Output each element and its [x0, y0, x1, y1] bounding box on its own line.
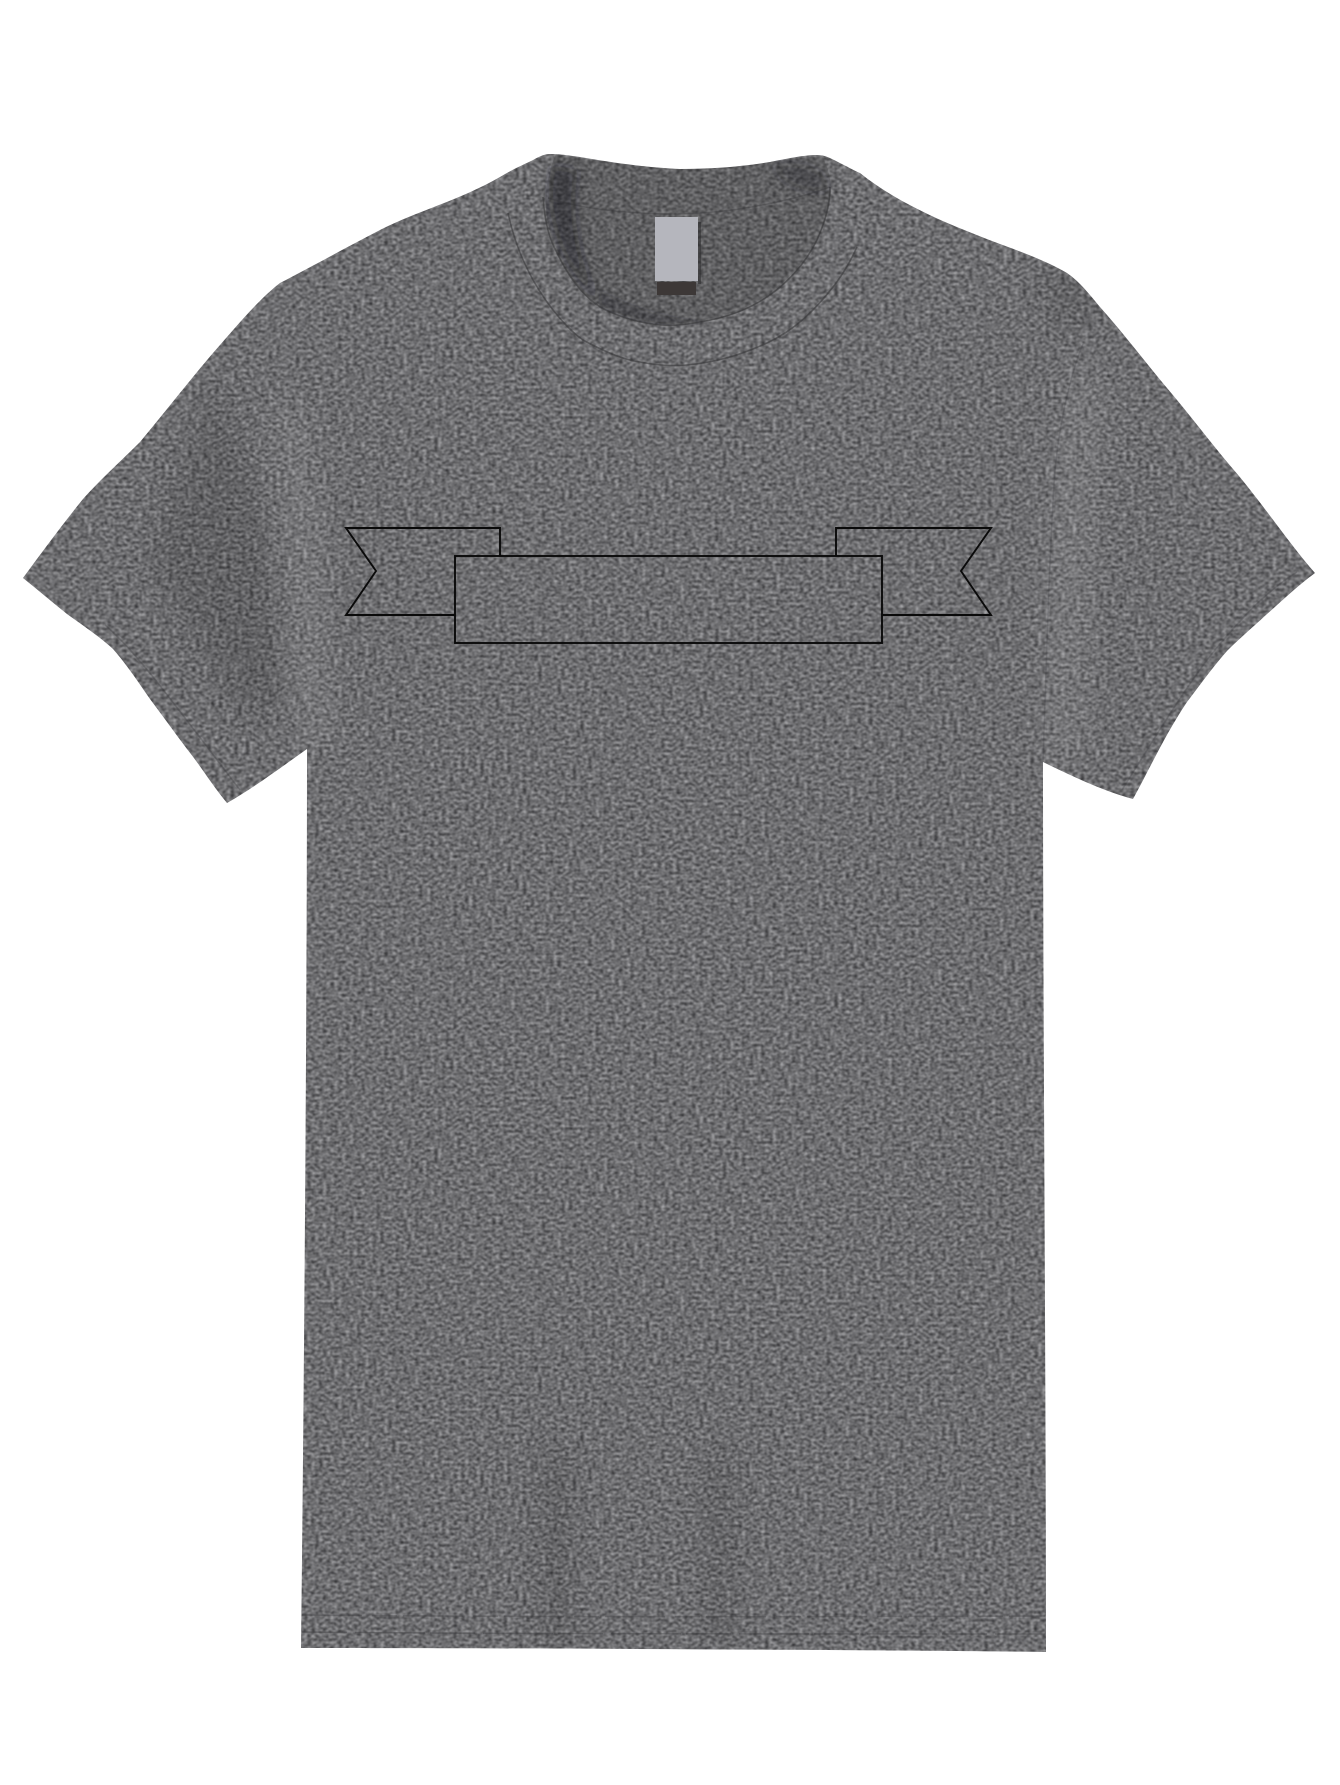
- collar and hem stitch lines: [105, 187, 1297, 1634]
- banner: right tail: [836, 528, 991, 615]
- sleeve and fold shading: [150, 258, 1105, 1650]
- collar interior shadow: [546, 154, 831, 325]
- banner: main panel: [455, 556, 882, 643]
- tag: shadow: [698, 222, 701, 284]
- tag: dark brand label: [657, 282, 696, 295]
- neck tag: [655, 217, 701, 295]
- banner: left tail: [346, 528, 500, 615]
- ribbon banner outline: [346, 528, 991, 643]
- tag: light size label: [655, 217, 698, 281]
